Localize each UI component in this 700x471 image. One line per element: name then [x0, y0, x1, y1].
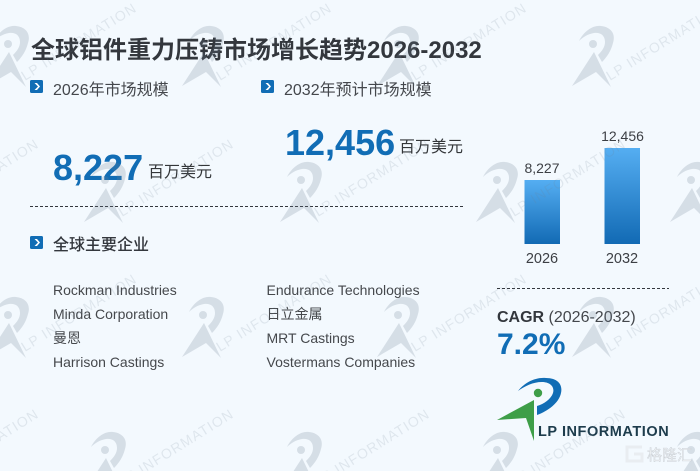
- heading: key companies: 全球主要企业: [53, 235, 149, 254]
- unit: 2026 value: 百万美元: [148, 163, 212, 181]
- company list: left column: Minda Corporation: [53, 306, 168, 322]
- bar: 2026: 2026: [526, 251, 558, 267]
- company list: right column: Vostermans Companies: [266, 354, 415, 370]
- company list: left column: [53, 282, 177, 370]
- heading: 2032 market size: 2032年预计市场规模: [284, 81, 432, 99]
- watermark pattern: LP INFORMATION: [115, 135, 236, 220]
- panel: 2032 market size: [261, 80, 463, 163]
- watermark pattern: LP INFORMATION: [408, 0, 529, 84]
- watermark pattern: LP INFORMATION: [311, 135, 432, 220]
- icon: 2026 bullet: [30, 80, 43, 93]
- bar: 2032: 12,456: [601, 128, 644, 144]
- logo swoosh: [518, 378, 561, 415]
- company list: right column: 日立金属: [266, 306, 322, 322]
- bar: 2032: 2032: [606, 251, 638, 267]
- bar: 2026: 8,227: [524, 160, 560, 176]
- logo arrow: [497, 400, 534, 441]
- watermark pattern: LP INFORMATION: [408, 270, 529, 355]
- logo: LP Information: [497, 378, 669, 441]
- icon: 2032 bullet: [261, 80, 274, 93]
- source name: 格隆汇: [647, 447, 692, 464]
- panel: key companies: [30, 235, 420, 370]
- watermark pattern: LP INFORMATION: [507, 135, 628, 220]
- panel: 2026 market size: [30, 80, 212, 188]
- source watermark: Gelonghui: [627, 447, 692, 464]
- watermark pattern: LP INFORMATION: [213, 270, 334, 355]
- unit: 2032 value: 百万美元: [399, 138, 463, 156]
- value: 12,456: 12,456: [285, 122, 395, 163]
- CAGR value: 7.2%: [497, 328, 565, 361]
- heading: 2026 market size: 2026年市场规模: [53, 81, 169, 99]
- logo dot: [534, 389, 542, 397]
- icon: Gelonghui G: [627, 447, 642, 461]
- CAGR label: CAGR (2026-2032): [497, 309, 636, 326]
- company list: right column: Endurance Technologies: [266, 282, 420, 298]
- logo text: LP INFORMATION: [538, 424, 669, 440]
- icon: companies bullet: [30, 236, 43, 249]
- company list: left column: Rockman Industries: [53, 282, 177, 298]
- watermark pattern: LP INFORMATION: [213, 0, 334, 84]
- company list: right column: MRT Castings: [266, 330, 355, 346]
- watermark pattern: LP INFORMATION: [18, 270, 139, 355]
- bar: 2026: [524, 160, 560, 267]
- bar chart: [524, 128, 644, 267]
- CAGR callout: [497, 309, 636, 361]
- value: 8,227: 8,227: [53, 147, 143, 188]
- bar: 2032: [601, 128, 644, 267]
- company list: left column: 曼恩: [53, 330, 81, 346]
- company list: right column: [266, 282, 420, 370]
- title: 全球铝件重力压铸市场增长趋势2026-2032: [31, 37, 482, 64]
- company list: left column: Harrison Castings: [53, 354, 164, 370]
- watermark pattern: LP INFORMATION: [18, 0, 139, 84]
